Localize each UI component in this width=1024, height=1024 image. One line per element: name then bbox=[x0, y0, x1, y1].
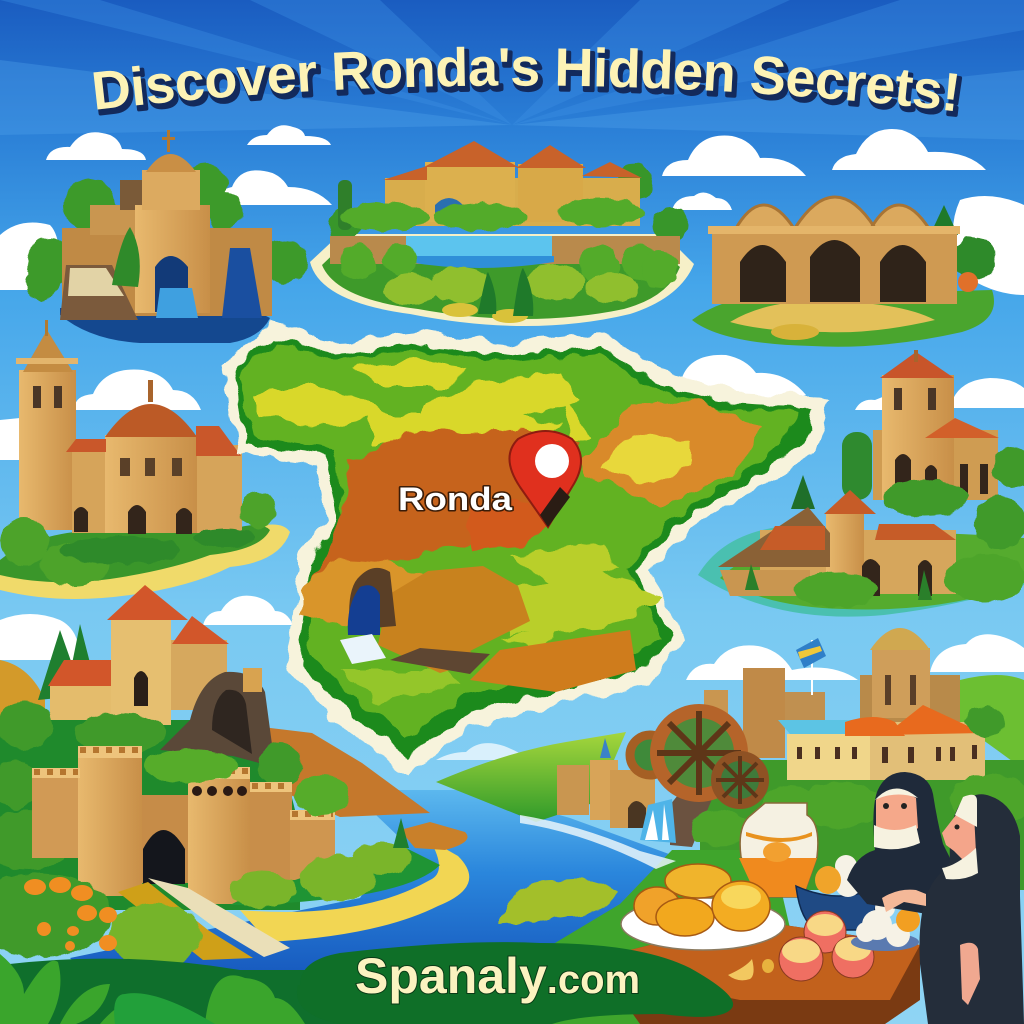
title: Discover Ronda's Hidden Secrets! bbox=[93, 46, 958, 111]
nun: back figure bbox=[847, 772, 953, 914]
hedge trees behind table bbox=[690, 774, 1024, 846]
orange tree bbox=[0, 873, 201, 967]
castle walls bbox=[32, 768, 80, 858]
map white outline bbox=[222, 322, 832, 775]
panel: top-left church with waterfall bbox=[26, 130, 307, 343]
map label: Ronda: Ronda bbox=[398, 481, 512, 517]
jar bbox=[739, 803, 818, 897]
map land bbox=[232, 336, 814, 758]
panel: watermill and fortress bbox=[557, 711, 764, 847]
panel: top-right arched building bbox=[692, 197, 997, 347]
island shore and stone steps bbox=[118, 818, 469, 960]
panel: top-centre palace on island bbox=[310, 141, 694, 326]
river bank and right meadow bbox=[436, 675, 1024, 1024]
river bbox=[70, 790, 680, 998]
panel: bottom-right palace bbox=[704, 628, 1005, 780]
map orange highlands bbox=[300, 430, 580, 601]
map yellow patches bbox=[258, 360, 660, 704]
panel: right church and farmhouse bbox=[698, 350, 1024, 617]
title: Discover Ronda's Hidden Secrets! bbox=[98, 48, 962, 117]
panel: Spain map bbox=[222, 322, 832, 775]
bottom foreground foliage bbox=[0, 954, 460, 1024]
panel: left church with tower and dome bbox=[0, 320, 290, 599]
banner: Spanaly.com bbox=[297, 942, 733, 1024]
banner: Spanaly.com: Spanaly.com bbox=[355, 948, 640, 1004]
plate of pastries bbox=[621, 864, 785, 950]
clouds bbox=[0, 125, 1024, 760]
panel: left hilltop house and castle bbox=[0, 585, 430, 910]
location pin bbox=[509, 431, 581, 527]
cliffs bbox=[378, 566, 530, 673]
panel: table with food bbox=[621, 803, 920, 1024]
pink fruits bbox=[779, 911, 874, 981]
bowl of sweets bbox=[796, 855, 880, 930]
white sweets plate bbox=[851, 898, 920, 951]
nun: front figure bbox=[882, 794, 1024, 1024]
